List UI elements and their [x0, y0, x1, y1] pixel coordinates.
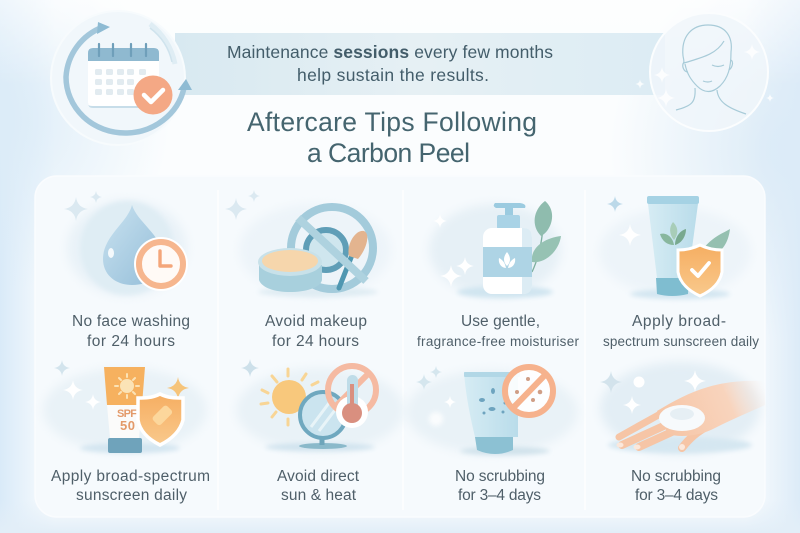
icon: tube with leaf and shield	[599, 196, 751, 299]
label	[72, 313, 190, 350]
tip: apply SPF 50	[43, 360, 210, 504]
SPF 50 label	[117, 408, 137, 433]
icon: face in circle	[636, 13, 774, 131]
label: for 24 hours	[87, 333, 175, 350]
label: for 24 hours	[272, 333, 359, 350]
SPF 50 label: 50	[120, 418, 135, 433]
panel: aftercare tips	[35, 176, 765, 517]
SPF 50 label: SPF	[117, 408, 137, 420]
label	[455, 468, 545, 504]
banner text: Maintenance sessions every few months	[227, 42, 553, 62]
icon: scrub tube crossed out	[406, 366, 578, 455]
label: Apply broad-spectrum	[51, 468, 210, 485]
banner text: help sustain the results.	[297, 65, 489, 85]
label: fragrance-free moisturiser	[417, 334, 580, 349]
label: spectrum sunscreen daily	[603, 334, 759, 349]
tip: no scrubbing hand	[600, 362, 765, 504]
label	[51, 468, 210, 504]
fingers	[619, 413, 708, 448]
tip: avoid sun and heat	[236, 359, 404, 504]
label: No scrubbing	[455, 468, 545, 485]
icon: calendar with renewal arrows	[51, 11, 192, 145]
icon: compact and brush crossed out	[225, 190, 391, 297]
check badge	[134, 76, 172, 114]
label	[265, 313, 367, 350]
top banner	[175, 33, 665, 95]
label: No face washing	[72, 313, 190, 330]
title: a Carbon Peel	[307, 138, 470, 168]
title: Aftercare Tips Following	[247, 107, 537, 137]
title	[247, 107, 537, 168]
label: Avoid direct	[277, 468, 360, 485]
tip: no face washing	[64, 191, 190, 350]
icon: sun, mirror and thermometer	[236, 359, 404, 452]
label: sun & heat	[281, 487, 357, 504]
label: Avoid makeup	[265, 313, 367, 330]
label: sunscreen daily	[76, 487, 187, 504]
icon: water drop and clock	[64, 191, 188, 296]
tip: avoid makeup	[225, 190, 391, 350]
tip: gentle moisturiser	[417, 201, 580, 349]
icon: SPF 50 tube and shield	[43, 360, 207, 453]
label	[603, 313, 759, 349]
label: No scrubbing	[631, 468, 721, 485]
label: for 3–4 days	[458, 487, 541, 504]
label	[277, 468, 360, 504]
icon: pump bottle with leaves	[429, 201, 561, 298]
icon: hand with cotton pad	[600, 362, 765, 454]
calendar	[88, 44, 159, 108]
tip: no scrubbing tube	[406, 366, 578, 504]
label	[417, 313, 580, 349]
label: for 3–4 days	[635, 487, 718, 504]
label: Use gentle,	[461, 313, 540, 330]
label: Apply broad-	[632, 313, 726, 330]
tip: apply sunscreen tube	[599, 196, 759, 349]
banner text	[227, 42, 553, 85]
label	[631, 468, 721, 504]
